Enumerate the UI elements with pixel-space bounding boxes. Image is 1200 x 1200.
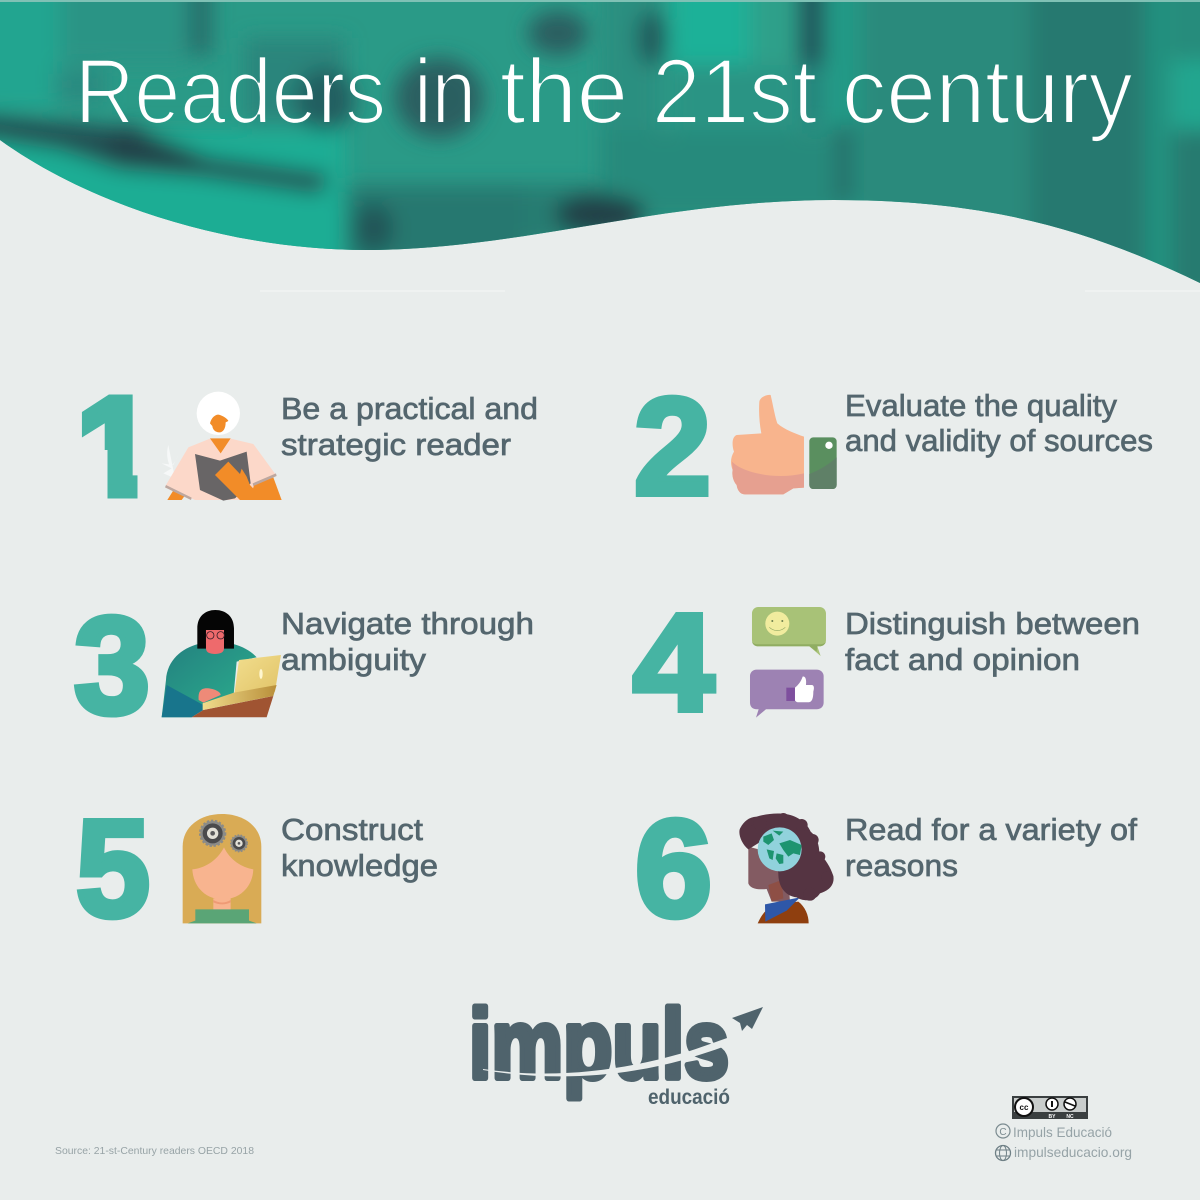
item 6	[635, 792, 1137, 946]
number 6: 6	[635, 792, 712, 946]
logo swoosh	[483, 1036, 733, 1076]
text 1: strategic reader	[281, 427, 511, 462]
website line: impulseducacio.org	[1014, 1144, 1132, 1160]
cc badge: BY	[1049, 1114, 1056, 1120]
icon: head with gears	[183, 814, 261, 923]
item 2	[634, 370, 1153, 524]
logo subtitle: educació	[648, 1086, 730, 1109]
licence block	[996, 1096, 1132, 1160]
text 2	[845, 388, 1153, 458]
item 3	[74, 589, 534, 743]
text 6: reasons	[845, 848, 958, 883]
text 5: knowledge	[281, 848, 438, 883]
item 1	[82, 392, 536, 501]
text 2: and validity of sources	[845, 423, 1153, 458]
number 4: 4	[633, 586, 714, 740]
number 3: 3	[74, 589, 150, 743]
text 1: Be a practical and	[281, 391, 538, 426]
text 3: Navigate through	[281, 606, 534, 641]
logo wordmark: impuls	[469, 989, 729, 1099]
copyright line: Impuls Educació	[1013, 1124, 1112, 1140]
text 6: Read for a variety of	[845, 812, 1137, 847]
item 5	[76, 792, 438, 946]
item 4	[633, 586, 1140, 740]
title	[75, 41, 1133, 143]
text 4: fact and opinion	[845, 642, 1080, 677]
number 1: 1	[77, 370, 154, 524]
number 5: 5	[76, 792, 150, 946]
title: the	[500, 41, 628, 143]
title: 21st	[652, 41, 817, 143]
text 4	[845, 606, 1140, 677]
icon: woman reading a book	[162, 392, 282, 501]
cc badge	[1012, 1096, 1088, 1120]
source note: Source: 21-st-Century readers OECD 2018	[55, 1145, 254, 1157]
text 5	[281, 812, 438, 883]
icon: thumbs up	[731, 395, 837, 494]
text 6	[845, 812, 1137, 883]
logo: impuls educacio	[469, 989, 763, 1109]
title: century	[842, 41, 1133, 143]
text 1	[281, 391, 538, 462]
cc badge: cc	[1020, 1103, 1029, 1112]
text 2: Evaluate the quality	[845, 388, 1117, 423]
text 3	[281, 606, 534, 677]
text 5: Construct	[281, 812, 423, 847]
cc badge: NC	[1066, 1114, 1074, 1120]
icon: person with laptop	[162, 610, 281, 717]
icon: head with globe	[739, 813, 834, 923]
header banner	[0, 0, 1200, 300]
icon: paper plane	[732, 1007, 763, 1031]
number 2: 2	[634, 370, 711, 524]
title: Readers	[75, 41, 386, 143]
title: in	[414, 41, 476, 143]
copyright line: C	[999, 1127, 1007, 1138]
icon: chat bubbles	[750, 607, 826, 718]
text 4: Distinguish between	[845, 606, 1140, 641]
text 3: ambiguity	[281, 642, 427, 677]
